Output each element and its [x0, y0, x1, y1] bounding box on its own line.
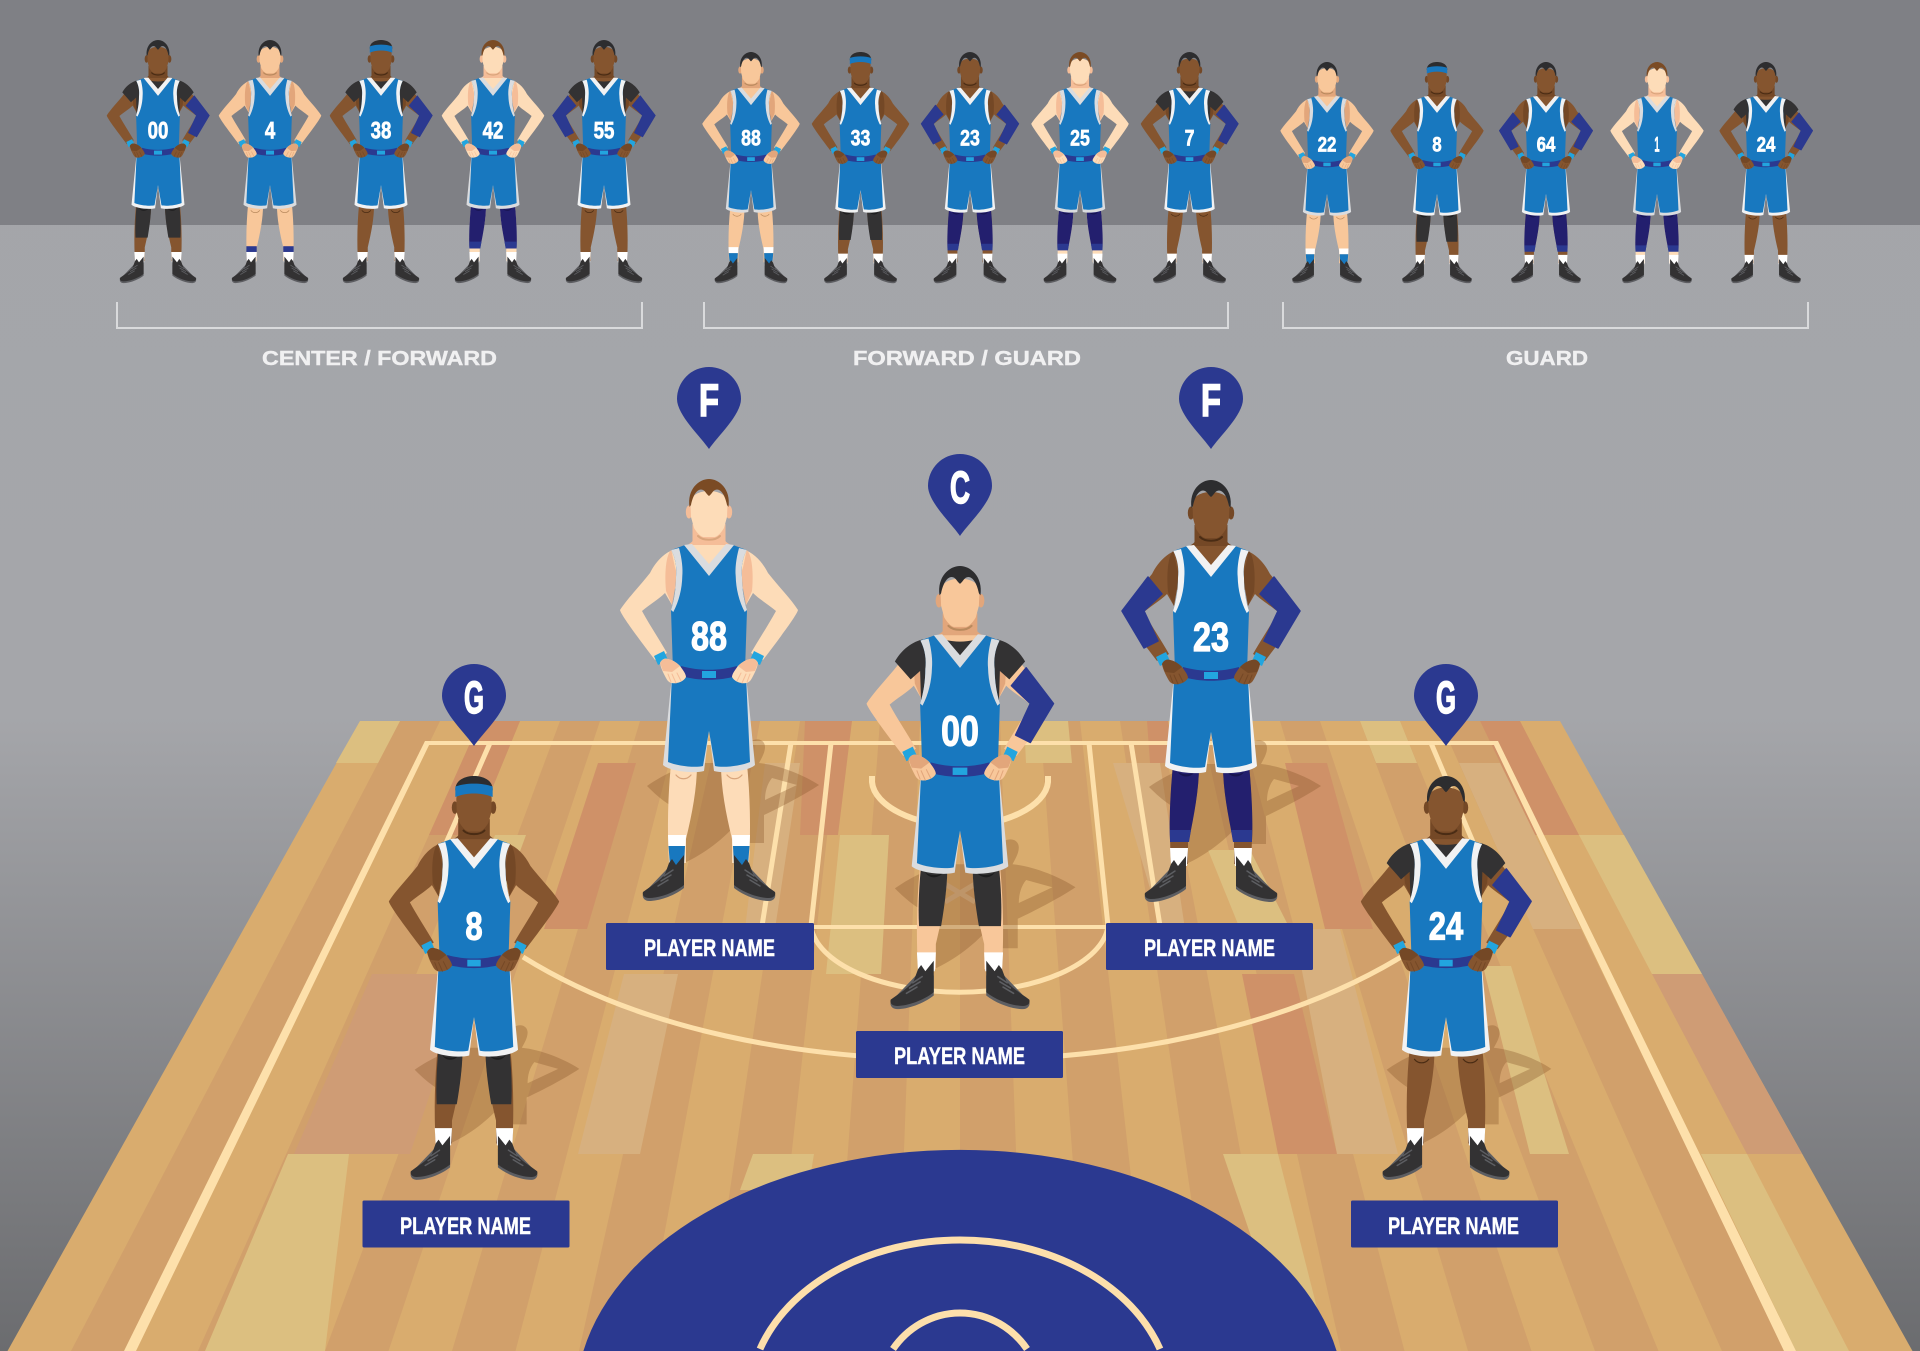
roster player 4: 4	[265, 118, 275, 144]
roster player 24	[1719, 62, 1813, 283]
starter: guard 24	[1361, 776, 1531, 1180]
roster row: guard	[1280, 62, 1813, 283]
position pin: G right	[1414, 664, 1478, 746]
name label: forward 88	[606, 923, 814, 970]
roster player 1	[1610, 62, 1704, 283]
name label: guard 8	[362, 1200, 570, 1248]
roster row: center / forward	[107, 40, 655, 283]
court lines	[124, 741, 1796, 1351]
group label: center / forward: CENTER / FORWARD	[262, 348, 497, 370]
center circle	[583, 1150, 1337, 1351]
roster player 25	[1031, 52, 1129, 283]
player shadow: number 00	[895, 839, 1076, 969]
name label: forward 88: PLAYER NAME	[644, 935, 775, 962]
name label: guard 24	[1351, 1200, 1558, 1248]
group label: guard: GUARD	[1506, 348, 1588, 370]
name label: forward 23	[1106, 923, 1313, 970]
position pin: G left	[442, 664, 506, 746]
jersey number 8: 8	[465, 905, 483, 949]
roster player 8: 8	[1432, 133, 1442, 157]
roster player 8	[1390, 62, 1484, 283]
roster player 55	[553, 40, 655, 283]
roster player 23: 23	[960, 126, 980, 151]
player shadow: number 88	[647, 739, 819, 863]
roster player 55: 55	[594, 118, 614, 144]
player shadow: number 23	[1149, 740, 1321, 864]
roster player 00: 00	[148, 118, 168, 144]
bracket: center / forward	[117, 302, 642, 328]
position pin: C	[928, 454, 992, 536]
position pin: C: C	[950, 462, 970, 513]
position pin: F right: F	[1201, 375, 1221, 426]
name label: center 00	[856, 1031, 1063, 1078]
jersey number 88: 88	[691, 613, 727, 659]
roster player 42	[442, 40, 544, 283]
bracket: guard	[1283, 302, 1808, 328]
roster player 33	[812, 52, 909, 283]
roster player 22	[1280, 62, 1374, 283]
roster player 88: 88	[741, 126, 761, 151]
starter: forward 88	[620, 479, 798, 901]
name label: guard 24: PLAYER NAME	[1388, 1213, 1519, 1240]
jersey number 00: 00	[941, 708, 979, 756]
name label: guard 8: PLAYER NAME	[400, 1213, 531, 1240]
roster player 23	[921, 52, 1019, 283]
starter: guard 8	[389, 776, 559, 1180]
roster player 22: 22	[1318, 133, 1336, 157]
roster player 1: 1	[1654, 133, 1660, 157]
position pin: G left: G	[464, 672, 484, 723]
player shadow: number 8	[415, 1025, 579, 1143]
roster player 00	[107, 40, 209, 283]
jersey number 23: 23	[1193, 614, 1229, 660]
position pin: F left: F	[699, 375, 719, 426]
roster player 7: 7	[1185, 126, 1194, 151]
roster player 64: 64	[1537, 133, 1555, 157]
roster row: forward / guard	[702, 52, 1238, 283]
player shadow: number 24	[1387, 1025, 1551, 1143]
roster player 88	[702, 52, 800, 283]
name label: forward 23: PLAYER NAME	[1144, 935, 1275, 962]
position pin: F left	[677, 367, 741, 449]
starter: forward 23	[1122, 480, 1300, 902]
roster player 24: 24	[1757, 133, 1775, 157]
bracket: forward / guard	[704, 302, 1228, 328]
jersey number 24: 24	[1429, 905, 1463, 949]
group label: forward / guard: FORWARD / GUARD	[853, 348, 1081, 370]
basketball court wood floor	[8, 721, 1912, 1351]
roster player 38: 38	[371, 118, 391, 144]
roster player 42: 42	[483, 118, 503, 144]
roster player 7	[1141, 52, 1238, 283]
roster player 64	[1499, 62, 1593, 283]
roster player 33: 33	[851, 126, 870, 151]
position pin: G right: G	[1436, 672, 1456, 723]
roster player 38	[330, 40, 432, 283]
roster player 4	[219, 40, 321, 283]
position pin: F right	[1179, 367, 1243, 449]
roster player 25: 25	[1070, 126, 1090, 151]
starter: center 00	[867, 566, 1053, 1009]
name label: center 00: PLAYER NAME	[894, 1043, 1025, 1070]
